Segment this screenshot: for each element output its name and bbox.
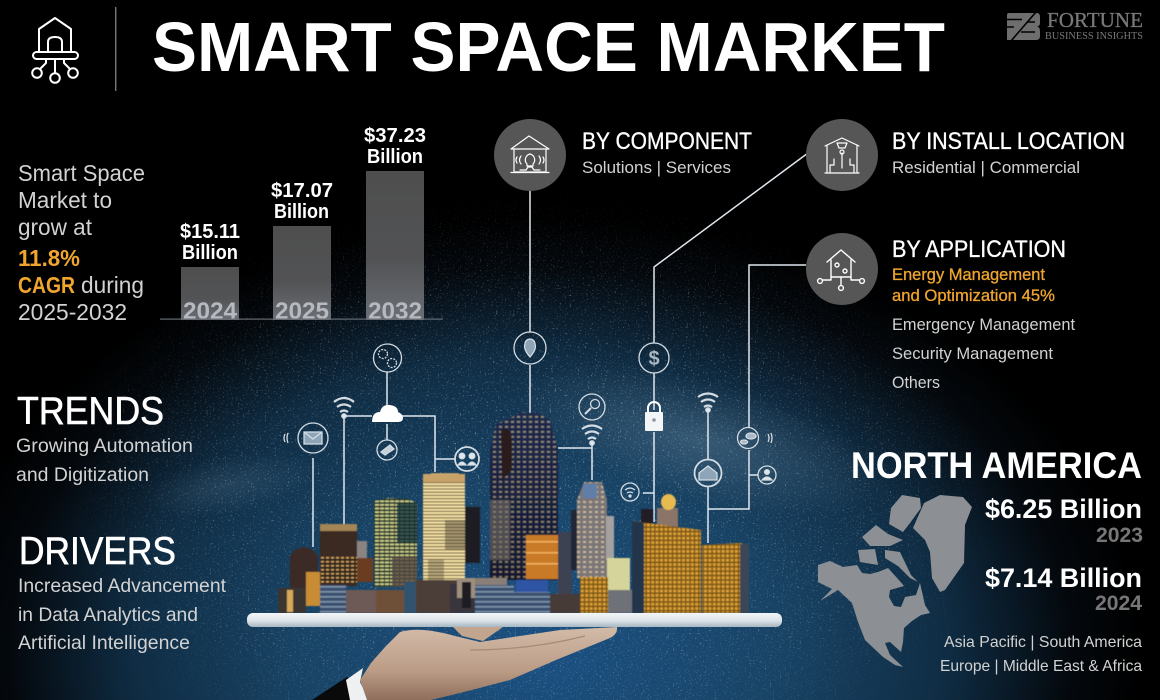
building tan with lamp xyxy=(641,494,678,538)
panel: by application: BY APPLICATION xyxy=(892,236,1066,263)
panel: by application: and Optimization 45% xyxy=(892,287,1055,305)
icon: wifi right xyxy=(698,394,718,412)
trends: and Digitization xyxy=(16,464,149,486)
CAGR statement: Market to xyxy=(18,187,112,213)
building cream tower xyxy=(423,473,465,583)
background: starry blue glow xyxy=(0,198,1098,700)
panel: by application: Energy Management xyxy=(892,266,1045,284)
building gold block xyxy=(632,521,701,613)
panel: by application xyxy=(806,233,1075,392)
icon: wifi circle xyxy=(621,483,639,501)
baffin island xyxy=(885,550,918,582)
building dark xyxy=(465,507,480,563)
building left tower xyxy=(320,524,357,586)
header divider xyxy=(115,7,116,91)
CAGR statement: 11.8% xyxy=(18,245,80,271)
panel: by install location: Residential | Commercial xyxy=(892,158,1080,177)
CAGR statement: 2025-2032 xyxy=(18,299,127,325)
map: North America xyxy=(818,495,972,667)
building grey tower xyxy=(571,482,607,578)
bar 2025: Billion xyxy=(274,201,329,223)
logo: Fortune Business Insights: BUSINESS INSIGHTS xyxy=(1045,31,1143,42)
panel: by install location: BY INSTALL LOCATION xyxy=(892,128,1125,155)
bar 2032 xyxy=(364,125,426,325)
drivers xyxy=(18,530,227,654)
icon: cloud xyxy=(372,405,403,422)
city skyline on tablet xyxy=(278,412,749,613)
icon: location pin xyxy=(514,332,546,364)
panel: north america stats: Europe | Middle East & Africa xyxy=(940,658,1142,675)
arctic islands xyxy=(858,549,878,565)
hand holding tablet xyxy=(312,627,617,700)
bar 2025: 2025 xyxy=(275,298,329,325)
sleeve and cuff xyxy=(312,668,369,700)
icon: gears xyxy=(374,344,402,372)
panel: by component: BY COMPONENT xyxy=(582,128,752,155)
icon: email xyxy=(284,423,328,453)
panel: north america stats xyxy=(851,445,1143,675)
panel: by application: Others xyxy=(892,373,940,392)
CAGR statement xyxy=(18,160,145,325)
panel: by component: Solutions | Services xyxy=(582,158,731,177)
bar 2025 xyxy=(271,180,333,325)
building pale right xyxy=(606,516,630,590)
bar 2024: Billion xyxy=(182,242,238,264)
drivers: Artificial Intelligence xyxy=(18,632,190,654)
building gold block right xyxy=(702,543,749,613)
icon: house with circuit xyxy=(806,119,878,191)
icon: wifi left xyxy=(334,398,354,418)
drivers: in Data Analytics and xyxy=(18,604,198,626)
title: SMART SPACE MARKET xyxy=(152,8,945,86)
drivers: DRIVERS xyxy=(19,530,176,573)
panel: north america stats: 2023 xyxy=(1096,524,1143,547)
panel: by application: Emergency Management xyxy=(892,315,1075,334)
icon: dollar xyxy=(639,343,669,373)
bar 2032: Billion xyxy=(367,146,423,168)
panel: by application: Security Management xyxy=(892,344,1053,363)
panel: north america stats: $7.14 Billion xyxy=(985,563,1142,593)
ellesmere island xyxy=(889,495,921,532)
bar 2024 xyxy=(180,221,240,325)
icon: people xyxy=(455,447,479,471)
mainland xyxy=(818,561,930,667)
trends: Growing Automation xyxy=(16,435,193,457)
building green tower xyxy=(374,498,417,587)
panel: north america stats: NORTH AMERICA xyxy=(851,445,1142,486)
small brown buildings xyxy=(357,541,373,582)
floating tech icons xyxy=(284,332,776,501)
tablet xyxy=(247,613,782,627)
icon: chat xyxy=(738,428,772,448)
bar 2032: 2032 xyxy=(368,298,422,325)
icon: book xyxy=(377,440,397,460)
drivers: Increased Advancement xyxy=(18,575,227,597)
bar chart: market size xyxy=(160,125,443,325)
building right dark small xyxy=(558,532,572,594)
icon: magnifier xyxy=(579,394,605,420)
icon: house with bulb xyxy=(494,119,566,191)
panel: by component xyxy=(494,119,752,191)
trends: TRENDS xyxy=(17,390,164,433)
bar 2025: $17.07 xyxy=(271,180,333,202)
panel: north america stats: 2024 xyxy=(1095,592,1142,615)
CAGR statement: Smart Space xyxy=(18,160,145,186)
low base buildings xyxy=(278,572,632,613)
panel: north america stats: Asia Pacific | South America xyxy=(944,634,1142,651)
icon: house network xyxy=(806,233,878,305)
building tallest tower xyxy=(490,412,558,580)
icon: person xyxy=(758,466,776,484)
building far left xyxy=(290,547,318,590)
greenland xyxy=(913,495,972,592)
icon: house circle xyxy=(694,460,722,486)
arctic islands north xyxy=(862,525,903,546)
panel: north america stats: $6.25 Billion xyxy=(985,494,1142,524)
CAGR statement: CAGR xyxy=(18,272,75,298)
CAGR statement: grow at xyxy=(18,214,93,240)
logo: Fortune Business Insights: FORTUNE xyxy=(1047,8,1143,32)
connector lines xyxy=(313,153,808,547)
trends xyxy=(16,390,193,486)
logo: Fortune Business Insights xyxy=(1007,8,1143,42)
CAGR statement: during xyxy=(81,272,144,298)
icon: dollar: $ xyxy=(648,348,660,370)
bar 2024: 2024 xyxy=(183,298,238,325)
bar 2032: $37.23 xyxy=(364,125,426,147)
bar 2024: $15.11 xyxy=(180,221,240,243)
header icon: smart house xyxy=(32,18,78,83)
icon: padlock xyxy=(645,402,663,431)
panel: by install location xyxy=(806,119,1125,191)
icon: wifi center xyxy=(582,426,602,445)
